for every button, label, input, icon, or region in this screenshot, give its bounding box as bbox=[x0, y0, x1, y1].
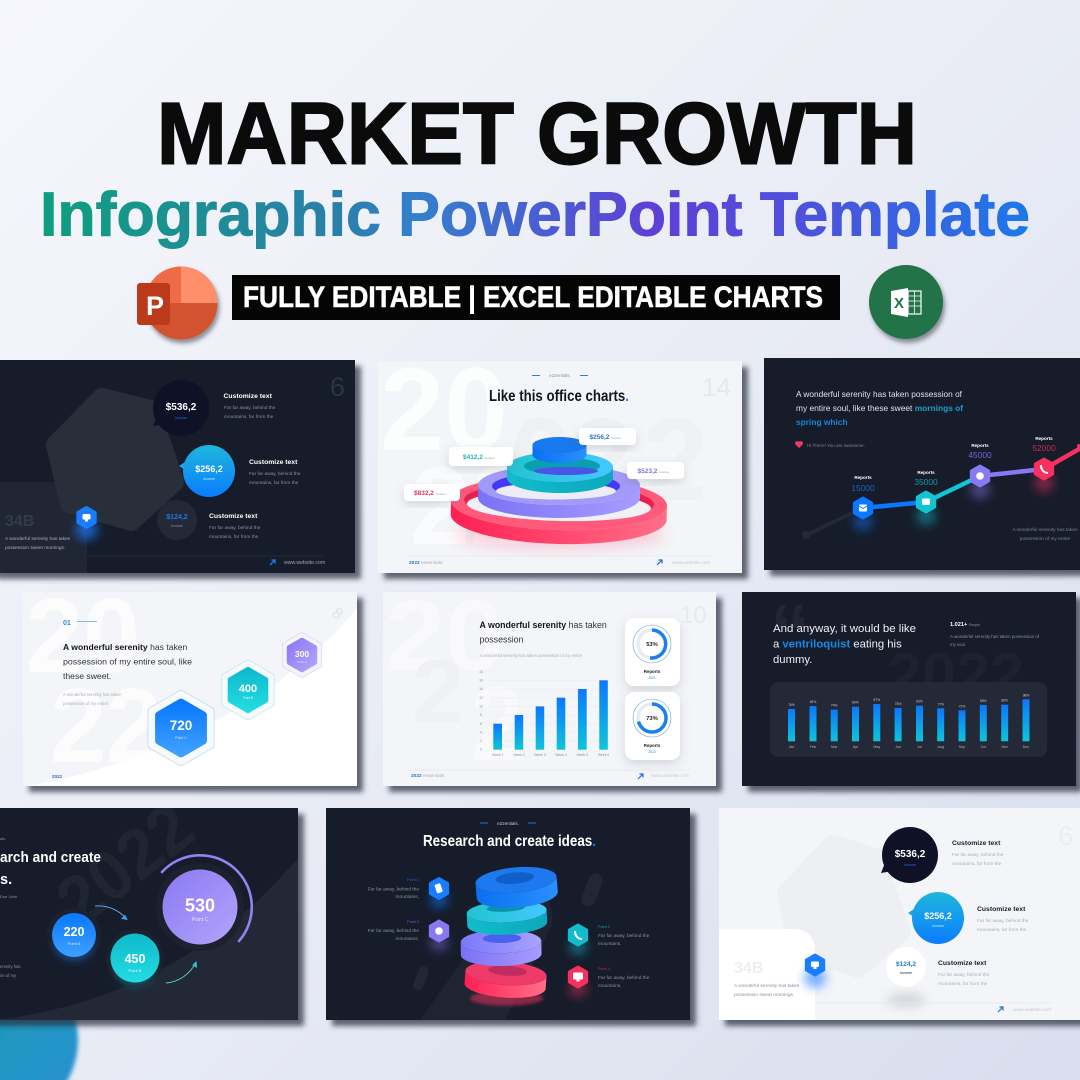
node: 15000: 15000 bbox=[851, 483, 875, 493]
panel: circles flow slide bbox=[0, 787, 298, 1020]
circle: 450: Point B bbox=[129, 968, 142, 973]
bar chart: 6 bbox=[480, 722, 482, 726]
bubble: 256,2 bbox=[908, 892, 964, 944]
item: point 4: Far far away, behind the bbox=[598, 975, 650, 981]
text: customize 2: Far far away, behind the bbox=[249, 471, 301, 477]
quote text: And anyway, it would be like bbox=[773, 623, 916, 635]
bar chart card: 76% bbox=[788, 703, 795, 707]
ghost year numbers: 2 bbox=[412, 642, 464, 742]
slide number: 6 bbox=[330, 372, 345, 402]
node: 45000 bbox=[968, 443, 992, 486]
bubble: 124,2 bbox=[886, 947, 926, 1007]
text: customize 1: Far far away, behind the bbox=[224, 405, 276, 411]
bubble: 124,2: Income bbox=[900, 971, 912, 975]
hexagon: 720: 720 bbox=[170, 718, 192, 733]
decorative shapes bbox=[411, 872, 605, 1020]
side card bbox=[719, 929, 815, 1020]
hexagon: 300 bbox=[285, 635, 319, 675]
ghost year numbers: 20 bbox=[26, 577, 140, 695]
bar chart: Week 1 bbox=[492, 753, 504, 757]
text: customize 3: Far far away, behind the bbox=[209, 525, 261, 531]
heading: A wonderful serenity has taken bbox=[480, 620, 607, 630]
heading: possession of my entire soul, like bbox=[63, 656, 192, 666]
panel: light speech bubbles slide bbox=[719, 808, 1080, 1020]
item: point 3: mountains, bbox=[396, 936, 419, 942]
card: 53% donut: Reports bbox=[644, 669, 661, 674]
bar chart card: Apr bbox=[853, 745, 859, 749]
card: 73% donut: Reports bbox=[644, 743, 661, 748]
footer: www.website.com bbox=[651, 773, 689, 779]
ghost year numbers: 20 bbox=[385, 580, 505, 692]
bar chart card: 98% bbox=[1023, 693, 1029, 697]
bubble: 536,2 bbox=[881, 827, 938, 883]
cropped text: arch and create bbox=[0, 850, 101, 866]
hexagon: 300: Point A bbox=[297, 660, 307, 664]
text: customize 1: Far far away, behind the bbox=[952, 852, 1004, 858]
bar chart: Week 3 bbox=[534, 753, 546, 757]
panel: monthly bars slide bbox=[742, 588, 1076, 786]
bubble: 536,2: Income bbox=[175, 416, 187, 420]
side card: possession sweet mornings. bbox=[5, 545, 65, 551]
lighter curved area bbox=[0, 858, 298, 1020]
section number: 01 bbox=[63, 620, 71, 627]
bar chart card: May bbox=[873, 745, 880, 749]
side card bbox=[0, 482, 87, 573]
card: 73% donut: 73% bbox=[646, 716, 658, 722]
bar chart: 16 bbox=[479, 679, 483, 683]
footer bbox=[815, 1003, 1052, 1013]
side card: 34B bbox=[5, 513, 34, 530]
circle: 530: Point C bbox=[192, 917, 209, 923]
bar chart: Week 2 bbox=[513, 753, 525, 757]
label: 256,2: $256,2 Income bbox=[590, 434, 621, 441]
item: point 3: Point 3 bbox=[407, 920, 419, 924]
circle: 450 bbox=[106, 929, 164, 987]
item: point 2 bbox=[569, 925, 650, 955]
bar chart card: 80% bbox=[852, 701, 859, 705]
cropped text: s. bbox=[0, 872, 12, 888]
bubble: 256,2: $256,2 bbox=[195, 464, 223, 474]
eyebrow bbox=[480, 821, 536, 826]
footer: www.website.com bbox=[672, 560, 710, 566]
text block bbox=[796, 389, 963, 427]
text: customize 1: Customize text bbox=[224, 393, 273, 400]
icon: Excel logo bbox=[869, 265, 943, 339]
bar chart: 2 bbox=[480, 739, 482, 743]
item: point 2: mountains, bbox=[598, 941, 621, 947]
stat text: 1.021+ People bbox=[950, 622, 980, 628]
quote text bbox=[773, 623, 916, 666]
text: customize 1: Customize text bbox=[952, 840, 1001, 847]
ring: blue top bbox=[532, 437, 586, 463]
caption: A wonderful serenity has taken bbox=[1012, 527, 1078, 533]
text: customize 3: mountains, far from the bbox=[938, 981, 988, 987]
side card: 34B bbox=[734, 960, 763, 977]
bar chart card: 74% bbox=[831, 704, 838, 708]
bar chart card: 72% bbox=[959, 704, 965, 708]
ghost year numbers bbox=[385, 580, 523, 783]
bar chart card: Jan bbox=[789, 745, 794, 749]
section number bbox=[63, 620, 97, 627]
text: customize 1: mountains, far from the bbox=[224, 414, 274, 420]
card: 53% donut: 53% bbox=[646, 642, 658, 648]
heading: Like this office charts. bbox=[489, 388, 629, 405]
text: customize 3: Customize text bbox=[938, 960, 987, 967]
label: 412,2 bbox=[449, 447, 513, 466]
bubble: 536,2: Income bbox=[904, 863, 916, 867]
text: customize 1 bbox=[224, 393, 276, 420]
hexagon: 720: Point C bbox=[175, 736, 187, 740]
bar chart: 4 bbox=[480, 730, 482, 734]
side card: possession sweet mornings. bbox=[734, 992, 794, 998]
bar chart card: Jul bbox=[917, 745, 922, 749]
circle: 220: Point A bbox=[68, 941, 81, 946]
cropped text: als. bbox=[0, 836, 6, 841]
heading: these sweet. bbox=[63, 671, 111, 681]
ghost year numbers: 20 bbox=[380, 344, 508, 476]
text: customize 3: Customize text bbox=[209, 513, 258, 520]
circle: 530: 530 bbox=[185, 896, 215, 916]
label: 412,2: $412,2 Income bbox=[463, 454, 495, 461]
text: customize 1 bbox=[952, 840, 1004, 867]
bar chart bbox=[479, 670, 612, 757]
footer: www.website.com bbox=[1013, 1007, 1051, 1013]
diagonal tint area bbox=[23, 592, 357, 787]
bubble: 124,2 bbox=[157, 500, 197, 540]
bubble: 124,2: $124,2 bbox=[166, 514, 188, 521]
bubble: 536,2: $536,2 bbox=[166, 402, 197, 413]
label: 256,2 bbox=[579, 428, 636, 445]
disc: blue bbox=[474, 864, 559, 911]
footer: 2022 essentials. bbox=[409, 560, 444, 566]
bar chart card: Dec bbox=[1023, 745, 1029, 749]
ring: teal bbox=[507, 452, 613, 493]
item: point 3 bbox=[368, 920, 448, 951]
label: 523,2: $523,2 Income bbox=[638, 468, 669, 475]
label: 832,2 bbox=[404, 484, 460, 501]
text: customize 2: Customize text bbox=[977, 906, 1026, 913]
side card: A wonderful serenity has taken bbox=[734, 983, 800, 989]
stat text bbox=[950, 622, 1040, 647]
text block: spring which bbox=[796, 417, 848, 427]
body text: possession of my entire bbox=[63, 701, 109, 706]
icon: Excel logo: X bbox=[894, 295, 904, 312]
cropped text: on of my bbox=[0, 973, 17, 978]
footer: 2022 bbox=[52, 774, 63, 779]
bar chart card: Nov bbox=[1001, 745, 1008, 749]
bubble: 256,2: Income bbox=[932, 924, 944, 928]
hexagon: 400 bbox=[225, 664, 271, 716]
item: point 1: Far far away, behind the bbox=[368, 886, 419, 892]
icon: PowerPoint logo: P bbox=[146, 291, 164, 321]
ring: purple bbox=[478, 465, 640, 518]
quote text: dummy. bbox=[773, 654, 812, 666]
card: 73% donut bbox=[625, 692, 680, 760]
item: point 3: Far far away, behind the bbox=[368, 928, 419, 934]
bar chart card: Feb bbox=[810, 745, 816, 749]
bar chart card: Jun bbox=[895, 745, 901, 749]
slide number: 8 bbox=[328, 605, 346, 624]
bar chart: 8 bbox=[480, 713, 482, 717]
text: customize 3: Far far away, behind the bbox=[938, 972, 990, 978]
heading: Research and create ideas. bbox=[423, 833, 596, 850]
body text: A wonderful serenity has taken bbox=[63, 692, 122, 697]
cropped text: Doe John bbox=[0, 894, 17, 899]
bar chart card: 77% bbox=[937, 702, 944, 706]
panel: bar chart slide bbox=[383, 580, 716, 786]
ghost year numbers: 2022 bbox=[42, 787, 208, 941]
side card: A wonderful serenity has taken bbox=[5, 536, 71, 542]
caption bbox=[1012, 528, 1078, 541]
bar chart card: 82% bbox=[810, 700, 816, 704]
ghost year numbers bbox=[384, 368, 503, 450]
text: customize 3 bbox=[938, 960, 990, 987]
ring: pink bbox=[450, 483, 667, 544]
slide number: 14 bbox=[702, 372, 731, 402]
item: point 2: Far far away, behind the bbox=[598, 933, 650, 939]
card: 73% donut: 2022 bbox=[648, 750, 656, 754]
node: 15000: Reports bbox=[854, 475, 872, 480]
card: 53% donut bbox=[625, 618, 680, 686]
ghost year numbers: 2 bbox=[642, 394, 708, 526]
arc around C bbox=[162, 855, 252, 941]
icon: blue hexagon bbox=[76, 508, 98, 540]
panel: hexagon stats slide bbox=[23, 577, 357, 787]
item: point 1: mountains, bbox=[396, 894, 419, 900]
title: MARKET GROWTH bbox=[157, 86, 917, 182]
ghost year numbers bbox=[26, 577, 162, 785]
text: customize 2 bbox=[977, 906, 1029, 933]
bar chart: 0 bbox=[480, 748, 482, 752]
bubble: 256,2: Income bbox=[203, 477, 215, 481]
node: 52000: 52000 bbox=[1032, 443, 1056, 453]
note with heart: Hi There! You are awesome. bbox=[807, 443, 865, 448]
heading bbox=[480, 620, 607, 644]
bar chart card: 85% bbox=[980, 699, 987, 703]
text: customize 3: mountains, far from the bbox=[209, 534, 259, 540]
bar chart: 18 bbox=[479, 670, 483, 674]
heading: possession bbox=[480, 634, 524, 644]
eyebrow bbox=[532, 374, 588, 377]
slide number: 6 bbox=[1058, 821, 1073, 851]
bar chart card: Oct bbox=[981, 745, 986, 749]
bar chart card: 78% bbox=[895, 702, 901, 706]
panel: 3D rings slide bbox=[378, 344, 742, 573]
ghost year numbers: 22 bbox=[50, 667, 162, 785]
footer bbox=[408, 556, 712, 566]
icon: PowerPoint logo bbox=[137, 266, 218, 340]
text block: A wonderful serenity has taken possession of bbox=[796, 389, 963, 399]
circle: 530 bbox=[156, 863, 244, 951]
arrow: A to B bbox=[95, 906, 127, 920]
bubble: 536,2 bbox=[153, 380, 209, 436]
bubble: 256,2: $256,2 bbox=[924, 911, 952, 921]
label: 832,2: $832,2 Income bbox=[414, 490, 446, 497]
body text: A wonderful serenity has taken possession of my entire bbox=[480, 653, 583, 658]
body text bbox=[63, 692, 122, 706]
banner: fully editable bbox=[232, 275, 840, 320]
eyebrow: e22entials. bbox=[497, 821, 519, 826]
bar chart card: 86% bbox=[1001, 699, 1008, 703]
cropped text: erenity has bbox=[0, 964, 20, 969]
background hexagon shape bbox=[56, 398, 174, 521]
bar chart card: 83% bbox=[916, 700, 923, 704]
bubble: 536,2: $536,2 bbox=[895, 849, 926, 860]
node: 35000: Reports bbox=[917, 470, 935, 475]
quote text: a ventriloquist eating his bbox=[773, 638, 902, 650]
item: point 4: mountains, bbox=[598, 983, 621, 989]
decorative corner blob bbox=[0, 956, 78, 1080]
panel: stacked discs slide bbox=[326, 808, 690, 1020]
item: point 2: Point 2 bbox=[598, 925, 610, 929]
bubble: 124,2: $124,2 bbox=[896, 961, 916, 968]
text: customize 2: Far far away, behind the bbox=[977, 918, 1029, 924]
ghost year numbers: 22 bbox=[410, 445, 530, 568]
bar chart: Week 4 bbox=[555, 753, 567, 757]
node: 35000 bbox=[914, 470, 938, 512]
chart: stacked discs bbox=[460, 864, 559, 1006]
hexagon: 720 bbox=[152, 695, 210, 761]
text: customize 2: mountains, far from the bbox=[249, 480, 299, 486]
circle: 220: 220 bbox=[64, 925, 84, 939]
background hexagon shape bbox=[787, 845, 901, 968]
panel: line chart slide bbox=[764, 358, 1080, 570]
bubble: 256,2 bbox=[179, 445, 235, 497]
bar chart card bbox=[770, 682, 1047, 757]
text: customize 3 bbox=[209, 513, 261, 540]
text: customize 2: Customize text bbox=[249, 459, 298, 466]
disc: pink bbox=[464, 959, 547, 1000]
caption: possession of my entire bbox=[1020, 536, 1071, 542]
ghost year numbers: 02 bbox=[510, 394, 634, 526]
bar chart: 10 bbox=[479, 704, 483, 708]
text block: my entire soul, like these sweet mornings of bbox=[796, 403, 963, 413]
line chart bbox=[802, 436, 1080, 539]
hexagon: 400: 400 bbox=[239, 683, 257, 695]
glows bbox=[853, 474, 1054, 531]
node: 52000: Reports bbox=[1035, 436, 1053, 441]
cropped text bbox=[0, 836, 101, 978]
bar chart: Week 5 bbox=[577, 753, 588, 757]
note with heart bbox=[795, 441, 865, 448]
item: point 4 bbox=[569, 967, 650, 997]
bar chart: Week 6 bbox=[598, 753, 609, 757]
circle: 220 bbox=[47, 908, 101, 962]
disc: purple bbox=[460, 929, 542, 967]
node: 15000 bbox=[851, 475, 875, 518]
item: point 4: Point 4 bbox=[598, 967, 610, 971]
arrow: B to C bbox=[166, 962, 196, 983]
chart: stacked 3D rings bbox=[450, 437, 668, 549]
disc: teal bbox=[466, 899, 548, 937]
bar chart card: Mar bbox=[831, 745, 838, 749]
stat text: A wonderful serenity has taken possession of bbox=[950, 634, 1040, 639]
heading: A wonderful serenity has taken bbox=[63, 642, 188, 652]
hexagon: 400: Point B bbox=[243, 696, 253, 700]
slide number: 10 bbox=[680, 602, 707, 629]
text: customize 2 bbox=[249, 459, 301, 486]
node: 45000: 45000 bbox=[968, 450, 992, 460]
node: 45000: Reports bbox=[971, 443, 989, 448]
bar chart: 14 bbox=[479, 687, 483, 691]
node: 52000 bbox=[1032, 436, 1056, 479]
item: point 1 bbox=[368, 878, 448, 908]
item: point 1: Point 1 bbox=[407, 878, 419, 882]
footer bbox=[87, 556, 325, 566]
node: 35000: 35000 bbox=[914, 477, 938, 487]
panel: dark speech bubbles slide bbox=[0, 360, 355, 573]
label: 523,2 bbox=[627, 462, 684, 479]
bar chart card: Aug bbox=[937, 745, 944, 749]
footer: www.website.com bbox=[284, 560, 325, 566]
stat text: my soul. bbox=[950, 642, 966, 647]
subtitle: Infographic PowerPoint Template bbox=[40, 180, 1030, 250]
text: customize 1: mountains, far from the bbox=[952, 861, 1002, 867]
eyebrow: e22entials. bbox=[549, 373, 571, 378]
ghost year numbers: 2 bbox=[471, 666, 523, 783]
bar chart card: Sep bbox=[959, 745, 965, 749]
card: 53% donut: 2021 bbox=[648, 676, 656, 680]
hexagon: 300: 300 bbox=[295, 649, 309, 659]
bubble: 124,2: Income bbox=[171, 524, 183, 528]
next point label stub bbox=[1077, 444, 1080, 448]
banner: fully editable: FULLY EDITABLE | EXCEL EDITABLE CHARTS bbox=[243, 281, 823, 314]
footer: 2022 essentials. bbox=[411, 773, 446, 779]
circle: 450: 450 bbox=[125, 952, 145, 966]
heading bbox=[63, 642, 192, 681]
text: customize 2: mountains, far from the bbox=[977, 927, 1027, 933]
ghost quote mark: “ bbox=[770, 588, 810, 677]
footer bbox=[410, 770, 690, 779]
ghost year numbers: 2022 bbox=[888, 641, 1024, 708]
icon: blue hexagon bbox=[804, 955, 826, 988]
bar chart card: 87% bbox=[873, 698, 880, 702]
bar chart: 12 bbox=[479, 696, 483, 700]
